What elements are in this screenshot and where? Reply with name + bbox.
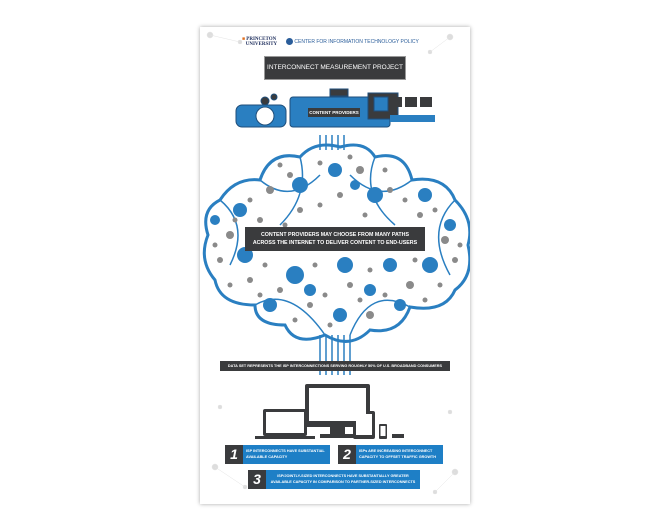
headline banner xyxy=(245,227,425,251)
background pattern xyxy=(206,32,458,494)
finding 1: ISP INTERCONNECTS HAVE SUBSTANTIAL xyxy=(246,449,325,453)
data set banner: DATA SET REPRESENTS THE ISP INTERCONNECTIONS SERVING ROUGHLY 50% OF U.S. BROADBAND CONSUMERS xyxy=(228,364,442,368)
machine: content providers xyxy=(236,88,435,128)
label: content providers xyxy=(308,108,360,117)
title xyxy=(264,56,406,80)
card xyxy=(200,27,470,504)
title: INTERCONNECT MEASUREMENT PROJECT xyxy=(267,64,403,71)
cloud network xyxy=(202,135,470,375)
logo: CITP: CENTER FOR INFORMATION TECHNOLOGY POLICY xyxy=(294,39,419,45)
headline banner: CONTENT PROVIDERS MAY CHOOSE FROM MANY PATHS xyxy=(261,232,409,238)
label: content providers: CONTENT PROVIDERS xyxy=(309,110,359,115)
finding 1: AVAILABLE CAPACITY xyxy=(246,455,287,459)
headline banner: ACROSS THE INTERNET TO DELIVER CONTENT TO END-USERS xyxy=(253,240,417,246)
logo: princeton: ■ PRINCETON xyxy=(242,37,276,42)
finding 1: 1 xyxy=(230,446,238,462)
finding 2 xyxy=(338,445,443,464)
finding 2: CAPACITY TO OFFSET TRAFFIC GROWTH xyxy=(359,455,436,459)
finding 3: 3 xyxy=(253,471,261,487)
finding 2: 2 xyxy=(343,446,351,462)
data set banner xyxy=(220,361,450,371)
logo: princeton: UNIVERSITY xyxy=(246,42,277,47)
finding 1 xyxy=(225,445,330,464)
finding 3: AVAILABLE CAPACITY IN COMPARISON TO PARTNER-SIZED INTERCONNECTS xyxy=(271,480,415,484)
logo: princeton xyxy=(242,36,277,47)
finding 2: ISPs ARE INCREASING INTERCONNECT xyxy=(359,449,432,453)
finding 3: ISP/JOINTLY-SIZED INTERCONNECTS HAVE SUBSTANTIALLY GREATER xyxy=(277,474,409,478)
devices xyxy=(255,384,404,439)
finding 3 xyxy=(248,470,420,489)
